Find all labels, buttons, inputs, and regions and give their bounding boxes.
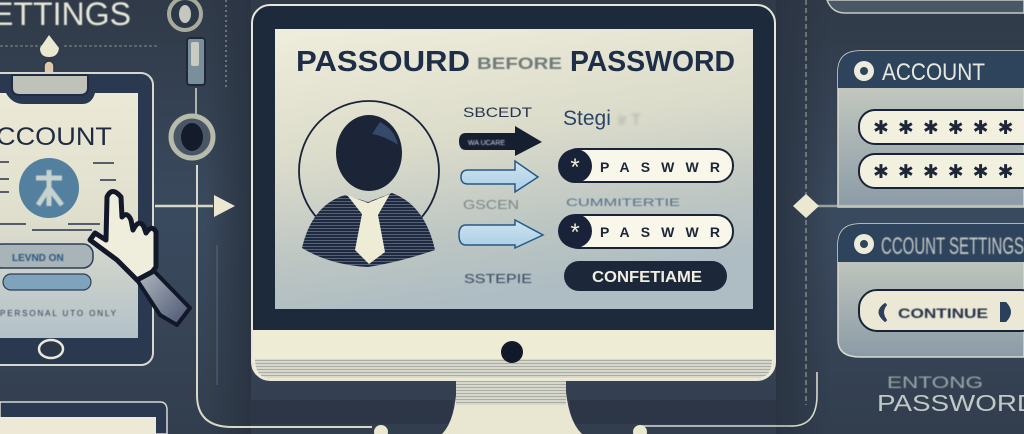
tablet small text: PERSONAL UTO ONLY [0, 309, 117, 318]
password field one: PASWWR [600, 159, 720, 175]
tablet button one: LEVND ON [12, 253, 64, 264]
header [838, 51, 1024, 88]
tablet button one [0, 244, 93, 268]
arrow: light one [461, 161, 538, 192]
field one [859, 110, 1024, 144]
arrow head: left [214, 195, 235, 217]
icon: droplet pin [40, 35, 59, 86]
screen heading right: PASSWORD [570, 46, 735, 78]
connector: diamond [793, 194, 1024, 218]
screen heading left: PASSOURD [296, 46, 470, 78]
icon: lens circle [171, 116, 213, 158]
monitor stand [442, 380, 582, 434]
panel: account passwords [838, 51, 1024, 207]
monitor body [252, 5, 775, 380]
tablet button dot [39, 340, 63, 358]
chin band [255, 359, 772, 378]
blue badge [19, 158, 79, 218]
continue field: CONTINUE [898, 305, 988, 321]
stand neck stripes [456, 381, 566, 405]
field two: ✱✱✱✱✱✱ [873, 162, 1023, 183]
connector lines [0, 0, 817, 427]
monitor chin [253, 330, 774, 379]
screen blurred word: BEFORE [477, 54, 562, 73]
continue field [859, 290, 1024, 331]
header [838, 224, 1024, 262]
panel: tablet [0, 73, 153, 365]
confirm button: CONFETIAME [592, 269, 702, 286]
step label five: SSTEPIE [464, 271, 532, 286]
caption: password: PASSWORD [877, 390, 1024, 416]
step label three: CUMMITERTIE [566, 197, 680, 209]
field two [859, 154, 1024, 188]
password field one: * [570, 154, 580, 181]
password field two: PASWWR [600, 224, 720, 240]
step label one: SBCEDT [463, 104, 533, 120]
tablet button two [3, 274, 91, 290]
stand side stripes [251, 400, 776, 424]
password field two: * [570, 219, 580, 246]
field one: ✱✱✱✱✱✱ [873, 118, 1023, 139]
panel: bottom left tablet [0, 402, 167, 434]
password field one [558, 149, 733, 183]
panel: monitor [252, 5, 775, 434]
tablet clip [12, 75, 88, 95]
blurred tail: ir T [618, 112, 641, 129]
header icon [854, 61, 874, 81]
monitor side shading [205, 0, 831, 434]
header icon [854, 234, 874, 254]
user avatar [299, 101, 439, 267]
node: stand left [374, 425, 388, 434]
step label two: Stegi [563, 107, 611, 130]
confirm button [564, 261, 727, 291]
icon: top ring [169, 0, 201, 30]
node: stand right [633, 425, 647, 434]
step label four: GSCEN [463, 197, 519, 212]
arrow: light two [459, 220, 543, 248]
tablet list marks [0, 162, 116, 230]
panel: account continue [838, 224, 1024, 357]
monitor screen [275, 29, 753, 309]
header text: ACCOUNT [882, 59, 985, 86]
password field two [558, 214, 733, 248]
tablet screen [0, 93, 138, 338]
arrow: dark step: WA UCARE [468, 140, 505, 147]
panel: top right stub [827, 0, 1024, 13]
monitor camera [501, 341, 523, 363]
icon: hand cursor [90, 192, 190, 325]
icon: capsule [187, 38, 205, 85]
arrow: dark step [459, 126, 542, 156]
caption: entering: ENTONG [887, 373, 983, 392]
